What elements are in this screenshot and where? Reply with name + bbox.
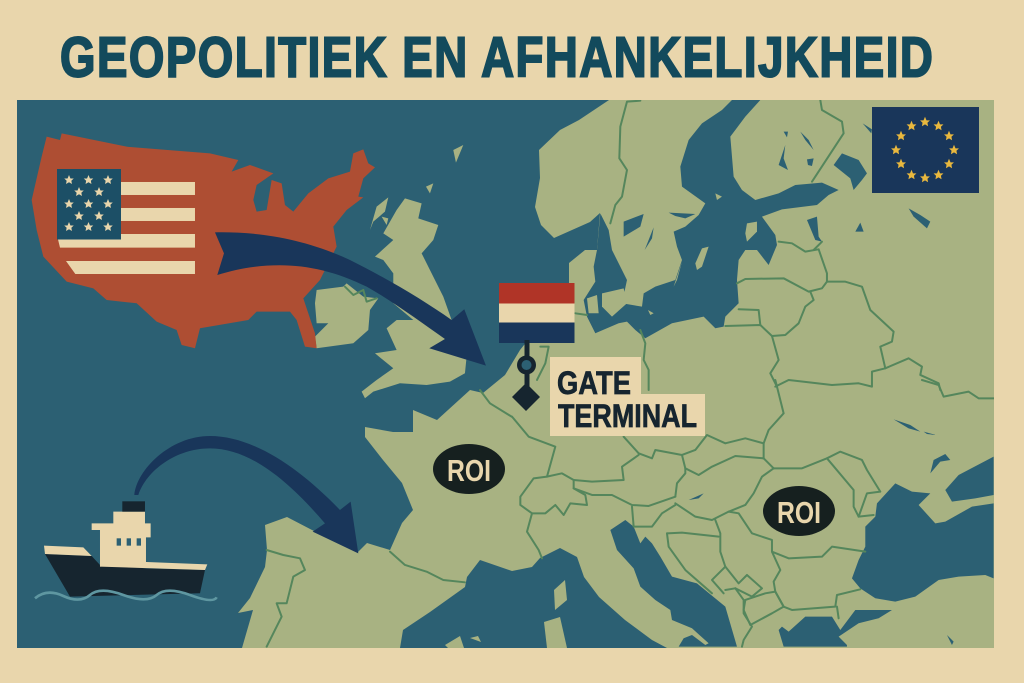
badge: ROI Romania (763, 486, 835, 536)
ship superstructure (92, 512, 151, 567)
ship bow deck (44, 546, 92, 556)
sea (17, 100, 609, 648)
islands: Corsica, Sardinia, Balearics (445, 580, 567, 648)
lakes and reservoirs south (689, 419, 954, 645)
badge: ROI Romania: ROI (777, 495, 821, 530)
ship windows (117, 538, 141, 546)
land: continental Europe and Scandinavia (238, 100, 994, 648)
sea: Aegean (779, 610, 892, 647)
land: Great Britain (362, 198, 467, 398)
flag: European Union (872, 107, 979, 193)
arrow: ship to Spain (134, 436, 358, 553)
location pin: Gate terminal (512, 340, 540, 411)
land: Ireland (315, 283, 378, 348)
badge: ROI France: ROI (447, 453, 491, 488)
arrow: USA to Netherlands (215, 232, 486, 366)
title: GEOPOLITIEK EN AFHANKELIJKHEID (60, 25, 933, 89)
map panel (17, 87, 994, 648)
label: Gate terminal: GATE (557, 365, 631, 401)
waves (35, 591, 217, 600)
lakes (624, 123, 930, 250)
ship hull (45, 554, 205, 597)
land: Danish islands and Baltic islands (587, 193, 757, 317)
US flag stripes (58, 182, 195, 274)
ship funnel (122, 501, 145, 512)
land: Hebrides and Orkney (370, 145, 463, 230)
country borders (267, 100, 994, 647)
US flag canton with stars (57, 169, 121, 240)
sea: Black Sea (852, 483, 994, 602)
flag: Netherlands (499, 283, 574, 343)
sea: Baltic and Kattegat (584, 87, 839, 338)
ship stern deck (100, 562, 207, 570)
sea: Adriatic and Ionian (610, 520, 737, 647)
sea: Azov (945, 457, 994, 502)
icon: ship (35, 501, 217, 600)
USA map with flag (32, 133, 375, 348)
sea: Mediterranean (400, 548, 667, 648)
USA shape (32, 133, 375, 348)
badge: ROI France (433, 444, 505, 494)
label: Gate terminal (550, 357, 705, 436)
label: Gate terminal: TERMINAL (558, 398, 697, 434)
